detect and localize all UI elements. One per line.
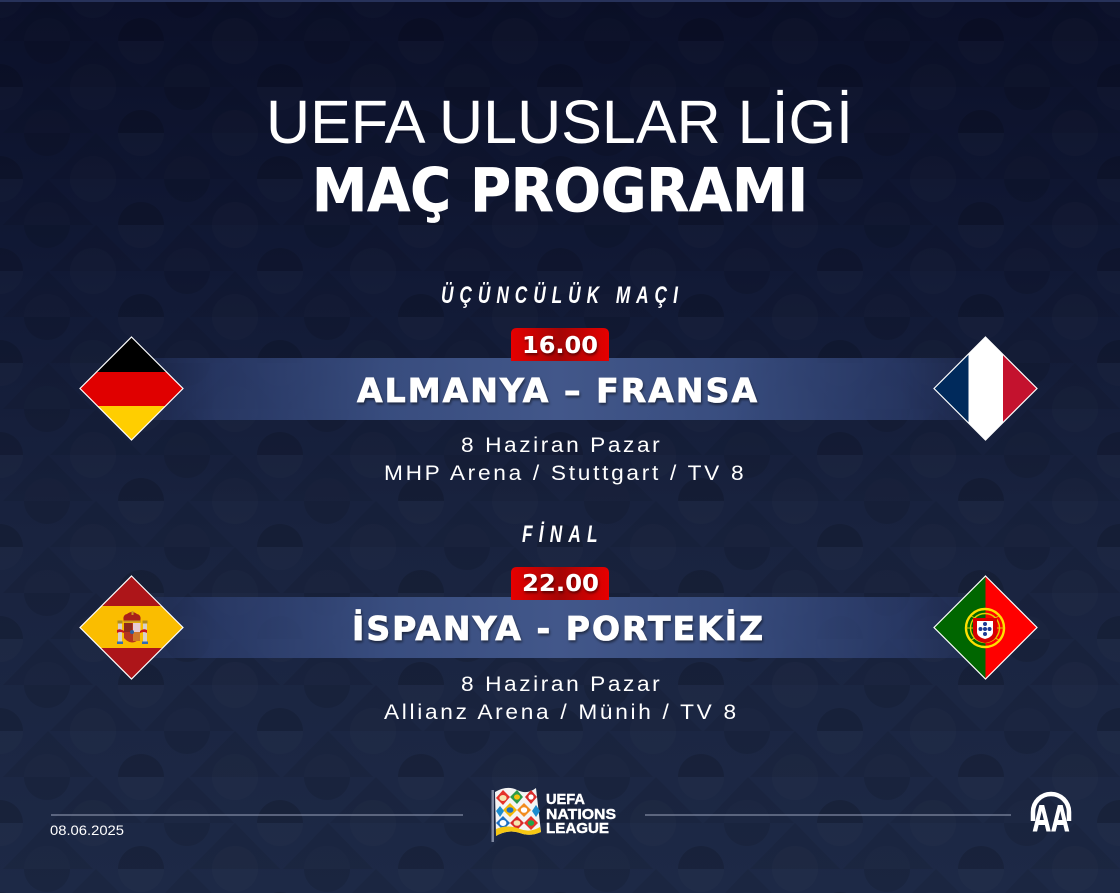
- flag: Spain: [80, 576, 184, 680]
- match panel: final: [80, 521, 1038, 724]
- time badge: [511, 567, 609, 600]
- logo: Anadolu Agency: AA: [1032, 798, 1070, 839]
- time badge: 22.00: [522, 571, 599, 597]
- match panel: third place: [80, 282, 1038, 485]
- teams: ALMANYA – FRANSA: [357, 371, 757, 410]
- logo wordmark: UEFA: [546, 791, 585, 808]
- title: [266, 88, 853, 226]
- logo: UEFA Nations League: [492, 788, 616, 842]
- team bar: [130, 597, 986, 658]
- time badge: [511, 328, 609, 361]
- logo: Anadolu Agency: [1032, 794, 1070, 839]
- section heading: ÜÇÜNCÜLÜK MAÇI: [441, 282, 679, 309]
- flag: Germany: [80, 337, 184, 441]
- section heading: FİNAL: [522, 521, 598, 548]
- coat of arms: [966, 609, 1004, 647]
- date stamp: 08.06.2025: [50, 822, 124, 838]
- flag: France: [934, 337, 1038, 441]
- coat of arms: [117, 611, 148, 644]
- right rule: [645, 814, 1011, 816]
- time badge: 16.00: [522, 333, 598, 359]
- logo wordmark: LEAGUE: [546, 820, 609, 837]
- title line 2: MAÇ PROGRAMI: [312, 156, 808, 226]
- left rule: [51, 814, 463, 816]
- venue: MHP Arena / Stuttgart / TV 8: [384, 461, 744, 485]
- flag mark: [492, 788, 541, 842]
- date: 8 Haziran Pazar: [461, 433, 660, 457]
- teams: İSPANYA - PORTEKİZ: [352, 608, 763, 648]
- venue: Allianz Arena / Münih / TV 8: [384, 700, 736, 724]
- flag: Portugal: [934, 576, 1038, 680]
- date: 8 Haziran Pazar: [461, 672, 660, 696]
- footer: [50, 788, 1070, 842]
- title line 1: UEFA ULUSLAR LİGİ: [266, 88, 853, 156]
- logo wordmark: NATIONS: [546, 806, 616, 823]
- team bar: [130, 358, 986, 420]
- logo wordmark: [546, 791, 616, 837]
